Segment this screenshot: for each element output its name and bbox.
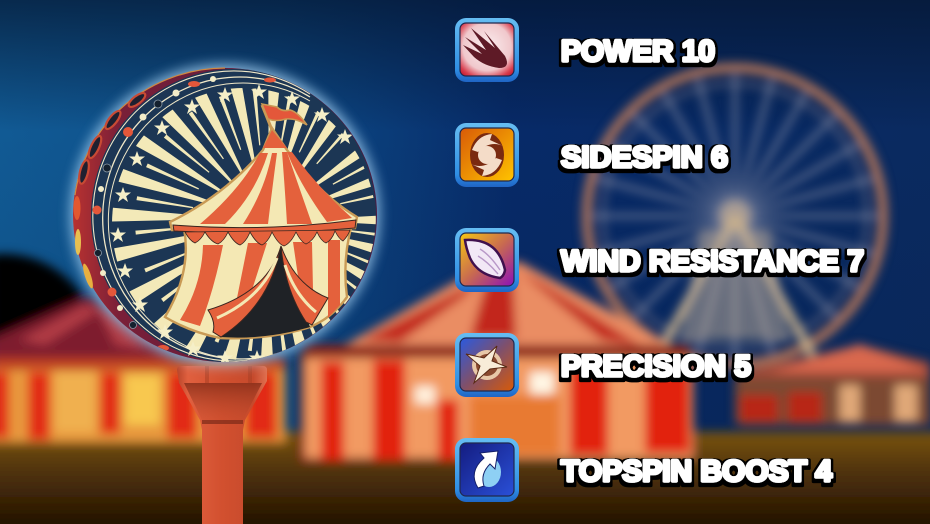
dots around rim <box>92 76 276 351</box>
label: precision: PRECISION 5 <box>561 350 751 383</box>
central big tent <box>300 262 695 462</box>
stat row: sidespin <box>455 123 728 187</box>
tent valance <box>173 220 356 233</box>
tent canopy <box>170 128 357 230</box>
icon: topspin arrow <box>455 438 519 502</box>
label: sidespin: SIDESPIN 6 <box>561 141 728 174</box>
wall stripes <box>180 240 340 326</box>
icon: wing <box>455 228 519 292</box>
right curtain <box>281 246 328 325</box>
ball side band <box>73 68 377 362</box>
tent doorway <box>221 246 310 338</box>
golf ball with circus tent design <box>62 56 388 375</box>
left curtain <box>208 246 281 337</box>
stat row: wind resistance <box>455 228 864 292</box>
ferris wheel <box>587 68 883 364</box>
stat row: precision <box>455 333 751 397</box>
tent lower wall <box>165 224 352 338</box>
ground <box>0 432 930 524</box>
tree silhouette <box>0 254 82 340</box>
label: wind resistance: WIND RESISTANCE 7 <box>561 245 864 278</box>
circus tent <box>165 104 357 338</box>
right distant tents <box>735 344 930 425</box>
icon: precision star <box>455 333 519 397</box>
sunburst rays <box>112 88 376 360</box>
flag <box>262 104 307 130</box>
label: power: POWER 10 <box>561 35 715 68</box>
ball face <box>91 69 376 362</box>
icon: sidespin ball <box>455 123 519 187</box>
golf tee <box>177 366 267 524</box>
stat row: power <box>455 18 715 82</box>
label: topspin boost: TOPSPIN BOOST 4 <box>561 455 832 488</box>
stat row: topspin boost <box>455 438 832 502</box>
rim lines <box>93 71 310 361</box>
icon: power claw <box>455 18 519 82</box>
ball glow <box>70 64 380 366</box>
stars <box>110 84 353 365</box>
left tent <box>0 296 285 442</box>
